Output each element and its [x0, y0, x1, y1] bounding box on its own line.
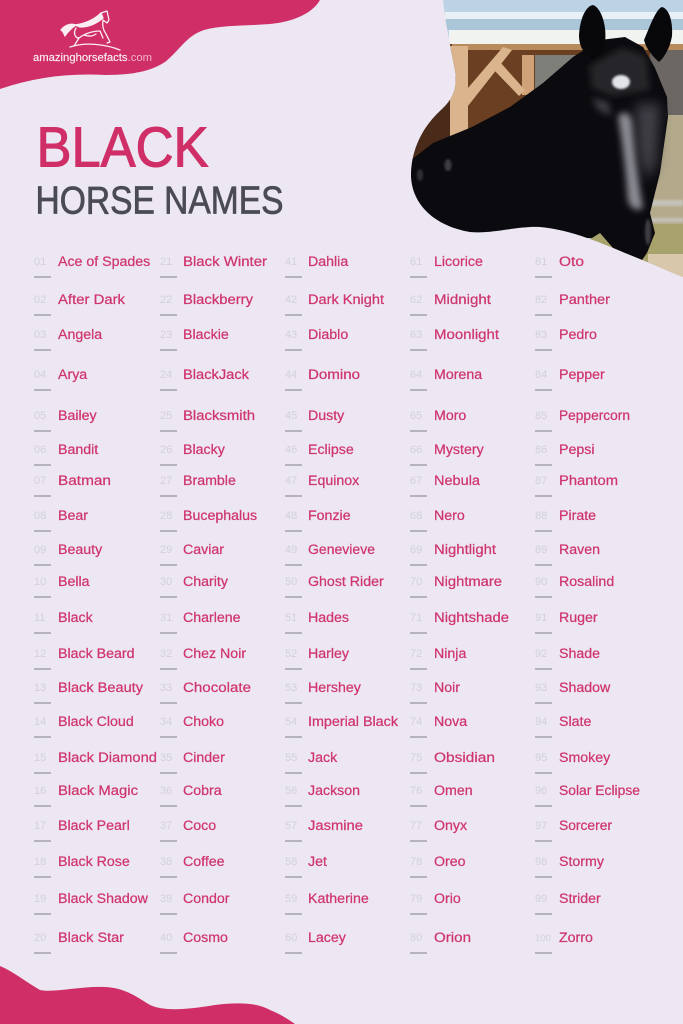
- name column 5: Solar Eclipse: [559, 783, 640, 799]
- name column 4: Licorice: [434, 254, 483, 270]
- name column 3: Dahlia: [308, 254, 348, 270]
- name column 1: 11: [34, 612, 45, 624]
- name column 3: [285, 254, 399, 954]
- name column 4: Oreo: [434, 854, 466, 870]
- name column 4: Nightmare: [434, 574, 502, 590]
- name column 3: Harley: [308, 646, 350, 662]
- name column 3: Jack: [308, 750, 338, 766]
- name column 5: 87: [535, 475, 547, 487]
- name column 3: Jackson: [308, 783, 360, 799]
- name column 2: Choko: [183, 714, 224, 730]
- name column 4: 63: [410, 329, 422, 341]
- name column 4: Orio: [434, 891, 461, 907]
- name column 4: 72: [410, 648, 422, 660]
- name column 5: Slate: [559, 714, 591, 730]
- name column 1: 04: [34, 369, 46, 381]
- name column 4: Midnight: [434, 292, 491, 308]
- name column 5: Zorro: [559, 930, 593, 946]
- name column 2: Charlene: [183, 610, 241, 626]
- name column 5: Pepsi: [559, 442, 594, 458]
- name column 2: 27: [160, 475, 172, 487]
- name column 1: Black Cloud: [58, 714, 134, 730]
- name column 1: Black Star: [58, 930, 124, 946]
- name column 3: 52: [285, 648, 297, 660]
- name column 5: 98: [535, 856, 547, 868]
- name column 5: Pirate: [559, 508, 596, 524]
- name column 2: 24: [160, 369, 172, 381]
- name column 3: 50: [285, 576, 297, 588]
- name column 5: 99: [535, 893, 547, 905]
- name column 4: Morena: [434, 367, 482, 383]
- name column 3: Ghost Rider: [308, 574, 384, 590]
- name column 3: Dark Knight: [308, 292, 384, 308]
- name column 3: Diablo: [308, 327, 348, 343]
- name column 2: 33: [160, 682, 172, 694]
- name column 5: [535, 254, 640, 954]
- name column 4: Orion: [434, 930, 471, 946]
- name column 4: 79: [410, 893, 422, 905]
- name column 2: 26: [160, 444, 172, 456]
- name column 5: 94: [535, 716, 547, 728]
- name column 2: 37: [160, 820, 172, 832]
- name column 3: Equinox: [308, 473, 359, 489]
- name column 5: Shade: [559, 646, 600, 662]
- name column 1: 06: [34, 444, 46, 456]
- name column 4: [410, 254, 509, 954]
- name column 2: 29: [160, 544, 172, 556]
- name column 1: 14: [34, 716, 46, 728]
- name column 2: Chez Noir: [183, 646, 246, 662]
- name column 4: Omen: [434, 783, 473, 799]
- photo: black horse: [400, 0, 683, 290]
- name column 1: 12: [34, 648, 46, 660]
- name column 3: 55: [285, 752, 297, 764]
- name column 4: 73: [410, 682, 422, 694]
- name column 3: Eclipse: [308, 442, 354, 458]
- name column 5: 83: [535, 329, 547, 341]
- name column 4: 80: [410, 932, 422, 944]
- name column 1: 17: [34, 820, 46, 832]
- name column 3: 42: [285, 294, 297, 306]
- name column 2: Charity: [183, 574, 229, 590]
- name column 1: 05: [34, 410, 46, 422]
- name column 2: Coco: [183, 818, 216, 834]
- name column 4: 67: [410, 475, 422, 487]
- name column 5: Stormy: [559, 854, 605, 870]
- name column 3: Domino: [308, 367, 360, 383]
- name column 2: [160, 254, 267, 954]
- name column 2: 32: [160, 648, 172, 660]
- name column 1: Beauty: [58, 542, 103, 558]
- name column 1: 13: [34, 682, 46, 694]
- name column 5: Raven: [559, 542, 600, 558]
- name column 2: Cosmo: [183, 930, 228, 946]
- name column 2: Cinder: [183, 750, 225, 766]
- name column 2: Bucephalus: [183, 508, 257, 524]
- logo text: amazinghorsefacts .com: [33, 52, 152, 64]
- name column 2: Caviar: [183, 542, 224, 558]
- name column 4: 64: [410, 369, 422, 381]
- name column 1: 01: [34, 256, 46, 268]
- title: HORSE NAMES: HORSE NAMES: [36, 180, 284, 222]
- name column 4: 69: [410, 544, 422, 556]
- name column 1: 03: [34, 329, 46, 341]
- name column 3: 49: [285, 544, 297, 556]
- name column 4: 71: [410, 612, 422, 624]
- name column 3: 43: [285, 329, 297, 341]
- name column 5: 92: [535, 648, 547, 660]
- name column 1: 18: [34, 856, 46, 868]
- name column 4: Onyx: [434, 818, 467, 834]
- name column 1: 15: [34, 752, 46, 764]
- name column 2: 38: [160, 856, 172, 868]
- name column 2: 22: [160, 294, 172, 306]
- name column 4: Nebula: [434, 473, 480, 489]
- name column 1: 16: [34, 785, 46, 797]
- name column 5: Phantom: [559, 473, 618, 489]
- name column 1: 19: [34, 893, 46, 905]
- name column 2: 40: [160, 932, 172, 944]
- name column 3: Hades: [308, 610, 349, 626]
- name column 3: Genevieve: [308, 542, 375, 558]
- name column 3: Jet: [308, 854, 327, 870]
- name column 5: 96: [535, 785, 547, 797]
- name column 3: 44: [285, 369, 297, 381]
- name column 5: Rosalind: [559, 574, 614, 590]
- name column 5: 84: [535, 369, 547, 381]
- name column 3: 41: [285, 256, 297, 268]
- name column 3: Hershey: [308, 680, 362, 696]
- name column 4: Moro: [434, 408, 466, 424]
- name column 2: 23: [160, 329, 172, 341]
- name column 3: Fonzie: [308, 508, 351, 524]
- name column 3: 57: [285, 820, 297, 832]
- name column 2: Cobra: [183, 783, 222, 799]
- name column 1: [34, 254, 157, 954]
- name column 2: 36: [160, 785, 172, 797]
- name column 3: 47: [285, 475, 297, 487]
- name column 1: Bandit: [58, 442, 98, 458]
- name column 1: Black Rose: [58, 854, 130, 870]
- name column 1: Bella: [58, 574, 90, 590]
- logo: amazinghorsefacts.com: [33, 11, 152, 64]
- name column 1: Batman: [58, 473, 111, 489]
- name column 2: 28: [160, 510, 172, 522]
- name column 1: Bear: [58, 508, 88, 524]
- name column 4: 74: [410, 716, 422, 728]
- bottom pink wave: [0, 966, 295, 1024]
- name column 2: Bramble: [183, 473, 236, 489]
- name column 3: Dusty: [308, 408, 345, 424]
- name column 5: 97: [535, 820, 547, 832]
- name column 5: Shadow: [559, 680, 611, 696]
- name column 5: Strider: [559, 891, 601, 907]
- name column 2: 31: [160, 612, 172, 624]
- name column 1: Black Pearl: [58, 818, 130, 834]
- name column 2: Blackberry: [183, 292, 254, 308]
- name column 5: Oto: [559, 254, 584, 270]
- name column 5: 93: [535, 682, 547, 694]
- name column 5: 91: [535, 612, 547, 624]
- name column 3: 59: [285, 893, 297, 905]
- name column 4: Nightshade: [434, 610, 509, 626]
- name column 2: 35: [160, 752, 172, 764]
- name column 1: 07: [34, 475, 46, 487]
- name column 4: 62: [410, 294, 422, 306]
- name column 1: Black Beard: [58, 646, 134, 662]
- name column 4: Nightlight: [434, 542, 496, 558]
- name column 2: Black Winter: [183, 254, 267, 270]
- name column 3: 53: [285, 682, 297, 694]
- name column 2: 21: [160, 256, 172, 268]
- name column 5: Panther: [559, 292, 610, 308]
- name column 3: 60: [285, 932, 297, 944]
- name column 1: Angela: [58, 327, 102, 343]
- name column 3: Imperial Black: [308, 714, 399, 730]
- name column 2: Blacky: [183, 442, 226, 458]
- name column 4: Noir: [434, 680, 460, 696]
- name column 2: Coffee: [183, 854, 225, 870]
- name column 3: 58: [285, 856, 297, 868]
- name column 1: Bailey: [58, 408, 98, 424]
- name column 4: 77: [410, 820, 422, 832]
- name column 2: BlackJack: [183, 367, 250, 383]
- name column 1: 20: [34, 932, 46, 944]
- name column 4: Ninja: [434, 646, 466, 662]
- name column 5: Peppercorn: [559, 408, 630, 424]
- name column 4: 66: [410, 444, 422, 456]
- name column 1: Black Shadow: [58, 891, 149, 907]
- name column 4: Mystery: [434, 442, 485, 458]
- name column 1: After Dark: [58, 292, 126, 308]
- name column 3: 54: [285, 716, 297, 728]
- name column 5: Ruger: [559, 610, 598, 626]
- name column 2: Condor: [183, 891, 230, 907]
- name column 4: 65: [410, 410, 422, 422]
- name column 2: 34: [160, 716, 172, 728]
- name column 3: 46: [285, 444, 297, 456]
- top pink wave: [0, 0, 320, 89]
- name column 4: 70: [410, 576, 422, 588]
- name column 4: 61: [410, 256, 422, 268]
- name column 2: Blackie: [183, 327, 229, 343]
- title: [36, 116, 284, 222]
- name column 2: 30: [160, 576, 172, 588]
- name column 3: Lacey: [308, 930, 347, 946]
- name column 4: 75: [410, 752, 422, 764]
- name column 3: Katherine: [308, 891, 369, 907]
- name column 1: Arya: [58, 367, 87, 383]
- name column 5: 95: [535, 752, 547, 764]
- name column 4: 68: [410, 510, 422, 522]
- name column 1: 08: [34, 510, 46, 522]
- name column 3: 48: [285, 510, 297, 522]
- name column 1: Black Diamond: [58, 750, 157, 766]
- name column 1: Black: [58, 610, 94, 626]
- name column 3: Jasmine: [308, 818, 363, 834]
- name column 4: 76: [410, 785, 422, 797]
- name column 5: 85: [535, 410, 547, 422]
- name column 2: 25: [160, 410, 172, 422]
- name column 5: Pedro: [559, 327, 597, 343]
- icon: horse: [61, 11, 120, 50]
- title: BLACK: BLACK: [36, 116, 208, 180]
- name column 5: Smokey: [559, 750, 611, 766]
- name column 4: Nova: [434, 714, 467, 730]
- name column 1: 10: [34, 576, 46, 588]
- name column 5: 100: [535, 933, 551, 944]
- name column 4: Moonlight: [434, 327, 499, 343]
- name column 1: Black Beauty: [58, 680, 144, 696]
- name column 5: Pepper: [559, 367, 605, 383]
- name column 5: 86: [535, 444, 547, 456]
- name column 4: 78: [410, 856, 422, 868]
- name column 5: 88: [535, 510, 547, 522]
- name column 3: 51: [285, 612, 297, 624]
- name column 2: Chocolate: [183, 680, 251, 696]
- name column 4: Nero: [434, 508, 465, 524]
- name column 2: 39: [160, 893, 172, 905]
- name column 5: 90: [535, 576, 547, 588]
- name column 2: Blacksmith: [183, 408, 255, 424]
- name column 5: 82: [535, 294, 547, 306]
- name column 4: Obsidian: [434, 750, 495, 766]
- name column 1: Black Magic: [58, 783, 138, 799]
- name column 1: 09: [34, 544, 46, 556]
- name column 3: 56: [285, 785, 297, 797]
- name column 3: 45: [285, 410, 297, 422]
- name column 1: Ace of Spades: [58, 254, 150, 270]
- name column 5: 89: [535, 544, 547, 556]
- name column 5: 81: [535, 256, 547, 268]
- name column 1: 02: [34, 294, 46, 306]
- name column 5: Sorcerer: [559, 818, 612, 834]
